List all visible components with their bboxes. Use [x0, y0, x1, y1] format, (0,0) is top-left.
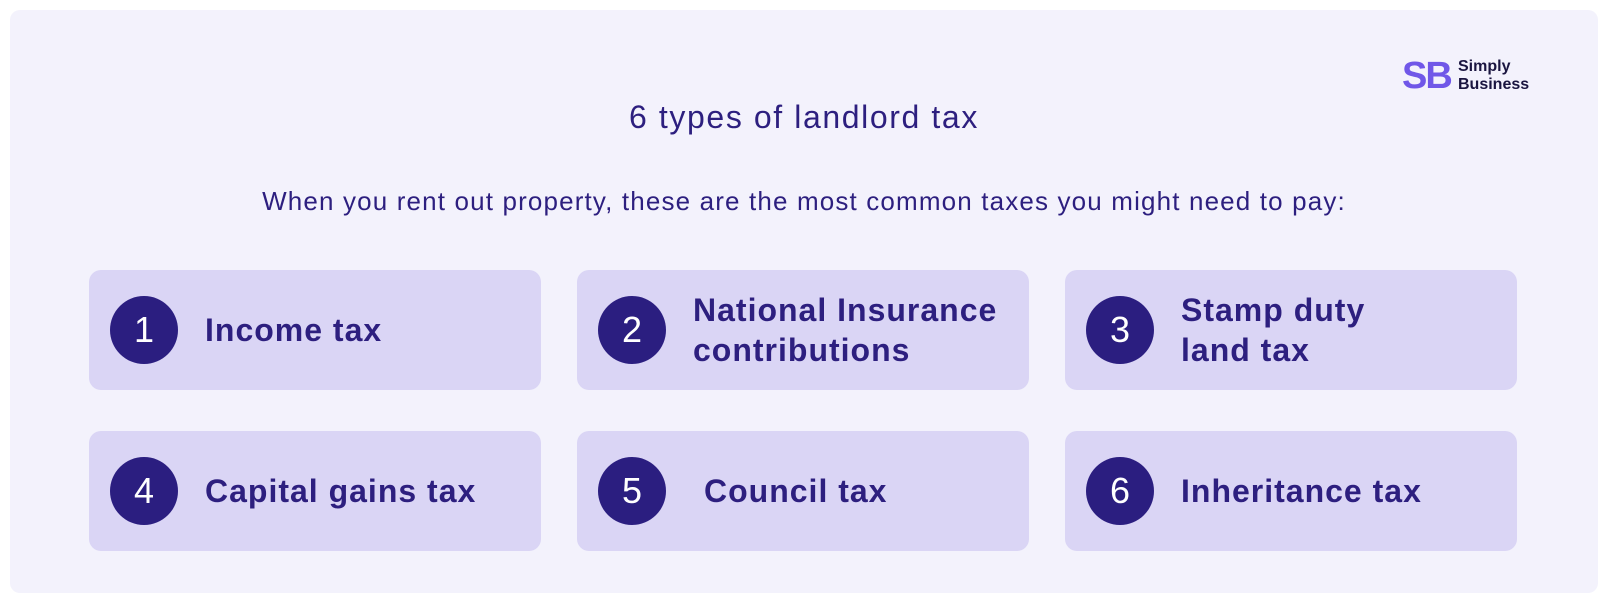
logo: Simply Business: SB: [1402, 55, 1451, 97]
card 5: Council tax: [704, 473, 887, 509]
card 6: 6: [1110, 470, 1130, 511]
logo: Simply Business: Business: [1458, 76, 1529, 93]
logo: Simply Business: Simply: [1458, 58, 1510, 75]
card 3: Stamp duty: [1181, 292, 1365, 328]
card 3: [1065, 270, 1517, 390]
card 5: 5: [622, 470, 642, 511]
card 2: contributions: [693, 332, 910, 368]
card 3: 3: [1110, 309, 1130, 350]
card 1: Income tax: [205, 312, 382, 348]
card 4: Capital gains tax: [205, 473, 476, 509]
logo: Simply Business: [1402, 55, 1529, 97]
card 4: [89, 431, 541, 551]
card 6: Inheritance tax: [1181, 473, 1422, 509]
card 3: land tax: [1181, 332, 1310, 368]
card 2: [577, 270, 1029, 390]
title: 6 types of landlord tax: [629, 99, 979, 135]
card 1: 1: [134, 309, 154, 350]
card 2: 2: [622, 309, 642, 350]
card 5: [577, 431, 1029, 551]
card 4: 4: [134, 470, 154, 511]
card 2: National Insurance: [693, 292, 997, 328]
subtitle: When you rent out property, these are the most common taxes you might need to pay:: [262, 186, 1346, 216]
card 6: [1065, 431, 1517, 551]
card 1: [89, 270, 541, 390]
